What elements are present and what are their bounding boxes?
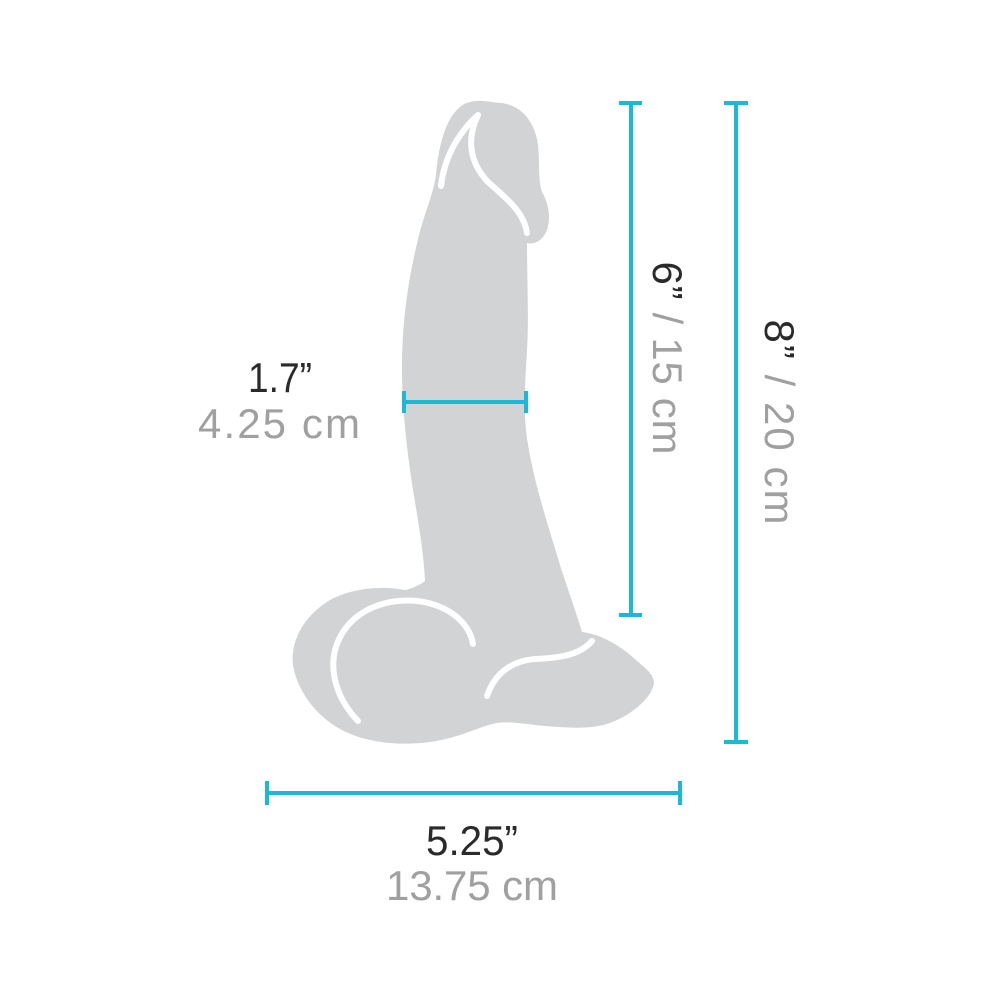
label: girth: 1.7” (248, 354, 312, 401)
label: 8 inch length: 8” / 20 cm (756, 320, 803, 524)
label: width: 5.25” (426, 817, 518, 864)
dimension: girth bar (404, 391, 526, 413)
label: 6 inch length: 6” / 15 cm (644, 262, 691, 454)
label: girth: 4.25 cm (198, 400, 360, 447)
label: girth (198, 354, 360, 447)
dimension: width bar (267, 781, 680, 805)
dimension: 6 inch bar (619, 103, 642, 615)
label: width (386, 817, 558, 909)
dimension: 8 inch bar (724, 103, 748, 742)
label: width: 13.75 cm (386, 862, 558, 909)
seam lines (333, 115, 592, 721)
product silhouette (293, 101, 654, 744)
